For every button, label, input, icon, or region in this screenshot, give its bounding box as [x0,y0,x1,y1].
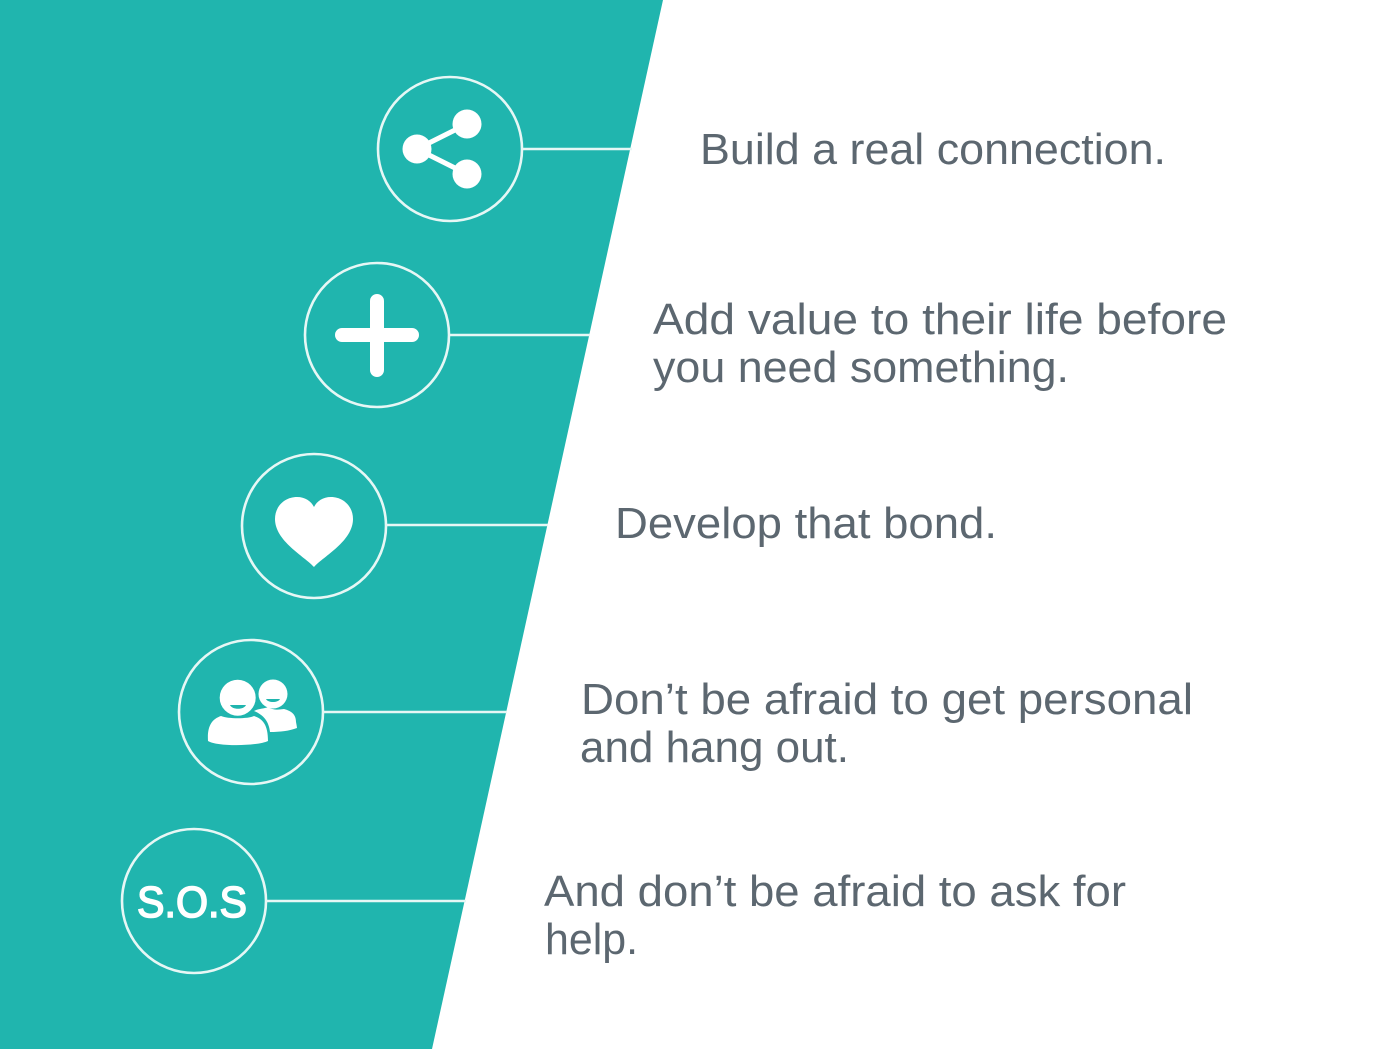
text: build a real connection: Build a real connection. [700,125,1166,174]
text: add value: Add value to their life before [653,295,1227,344]
icon: S.O.S: S.O.S [137,878,247,927]
text: ask for help: help. [545,915,638,964]
icon: S.O.S [122,829,266,973]
text: ask for help: And don’t be afraid to ask for [544,867,1126,916]
step 5: ask for help [122,829,1138,973]
icon: two people [179,640,323,784]
text: get personal: and hang out. [580,723,849,772]
panel: teal slanted background [0,0,663,1049]
step 2: add value [305,263,1239,407]
icon: heart [242,454,386,598]
step 4: get personal [179,640,1205,784]
step 3: develop that bond [242,454,997,598]
text: get personal: Don’t be afraid to get personal [581,675,1193,724]
icon: plus [305,263,449,407]
step 1: build a connection [378,77,1166,221]
text: develop that bond: Develop that bond. [615,499,997,548]
icon: share [378,77,522,221]
text: add value: you need something. [653,343,1069,392]
